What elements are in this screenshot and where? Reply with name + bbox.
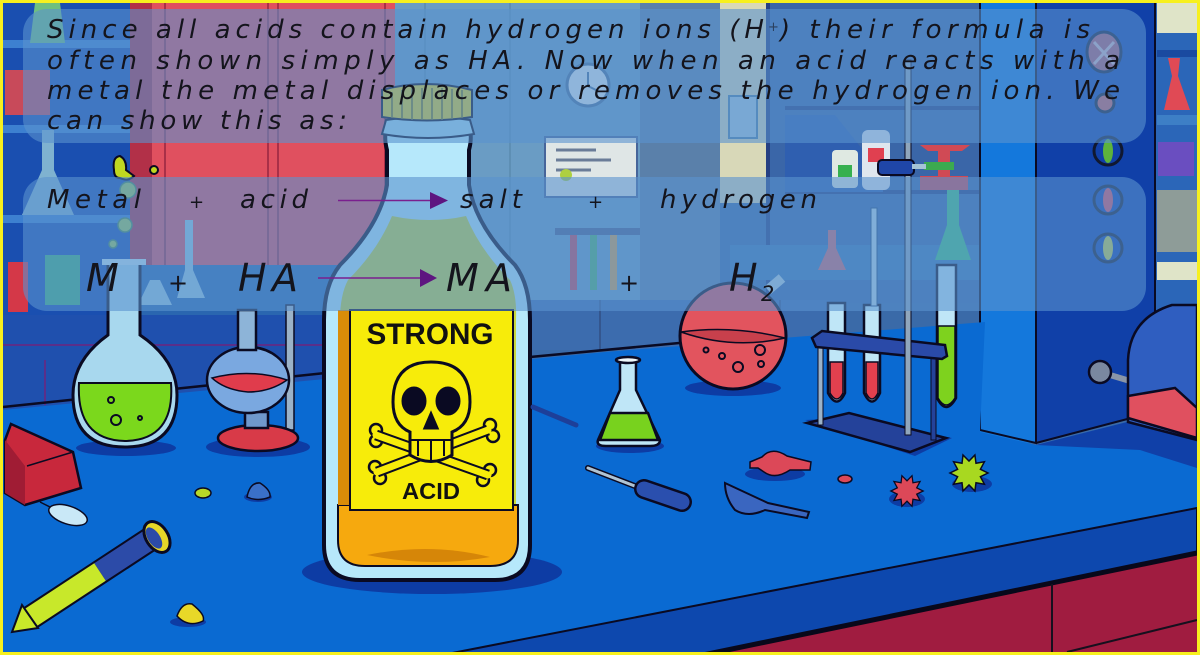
test tube rack (807, 265, 956, 452)
bottle neck ring (382, 117, 474, 138)
label text: strong: STRONG (366, 318, 494, 351)
lower cabinets (3, 315, 330, 412)
small pen behind bottle (533, 407, 576, 425)
panel paragraph text: ) their formula is (778, 15, 1090, 45)
red round flask (680, 278, 786, 389)
label text: acid: ACID (402, 478, 460, 504)
bottle glass (324, 125, 530, 580)
pillar dials (1087, 32, 1122, 262)
clipboard (729, 96, 757, 138)
bench front edge (442, 508, 1197, 655)
pencil dropper (588, 468, 682, 502)
red block (5, 424, 81, 505)
word equation: acid (240, 185, 308, 215)
symbol equation (86, 256, 774, 306)
word equation (47, 185, 817, 215)
skull and crossbones (369, 362, 499, 486)
symbol equation: H (729, 256, 758, 300)
symbol equation arrow (318, 269, 437, 287)
wall clock (567, 64, 609, 106)
machine on right (1089, 305, 1197, 440)
panel paragraph text: can show this as: (47, 106, 347, 136)
word equation: + (189, 192, 204, 213)
panel paragraph text: + (768, 20, 779, 35)
background rack and flasks (555, 190, 971, 290)
blue flask on red stand (207, 305, 298, 451)
notice board (545, 137, 637, 197)
bottle cap (382, 84, 472, 120)
left shelf flasks (8, 220, 205, 312)
panel paragraph text (47, 15, 1120, 136)
right wall shelves (1155, 3, 1197, 333)
symbol equation: MA (446, 256, 512, 300)
conical flask (598, 357, 660, 446)
symbol equation: 2 (761, 282, 774, 306)
spatula (725, 483, 809, 518)
symbol equation: M (86, 256, 119, 300)
word equation arrow (338, 192, 448, 209)
bottom translucent equations panel (23, 177, 1146, 311)
glass bulb (40, 500, 90, 530)
panel paragraph text: metal the metal displaces or removes the hydrogen ion. We (47, 76, 1120, 106)
liquid lower (338, 505, 518, 566)
word equation: hydrogen (660, 185, 817, 215)
word equation: salt (460, 185, 523, 215)
pillar cabinet (980, 3, 1155, 443)
bench drawers (703, 553, 1197, 655)
symbol equation: + (619, 269, 639, 297)
red blob and residues (750, 451, 988, 506)
liquid upper (340, 216, 516, 515)
acid bubbles from flask (109, 156, 158, 248)
bench top (3, 322, 1197, 655)
panel paragraph text: Since all acids contain hydrogen ions (H (47, 15, 764, 45)
test tubes (828, 265, 956, 407)
shadows on bench (76, 380, 992, 627)
panel paragraph text: often shown simply as HA. Now when an acid reacts with a (47, 46, 1120, 76)
marker pen (12, 517, 175, 632)
top translucent text panel (23, 9, 1146, 143)
retort stand rod and clamp (871, 60, 954, 435)
word equation: + (588, 192, 603, 213)
symbol equation: HA (238, 256, 298, 300)
acid bottle (324, 84, 530, 580)
green round flask (73, 262, 177, 447)
word equation: Metal (47, 185, 142, 215)
symbol equation: + (168, 269, 188, 297)
warning label (350, 310, 513, 510)
pebbles (177, 483, 270, 624)
